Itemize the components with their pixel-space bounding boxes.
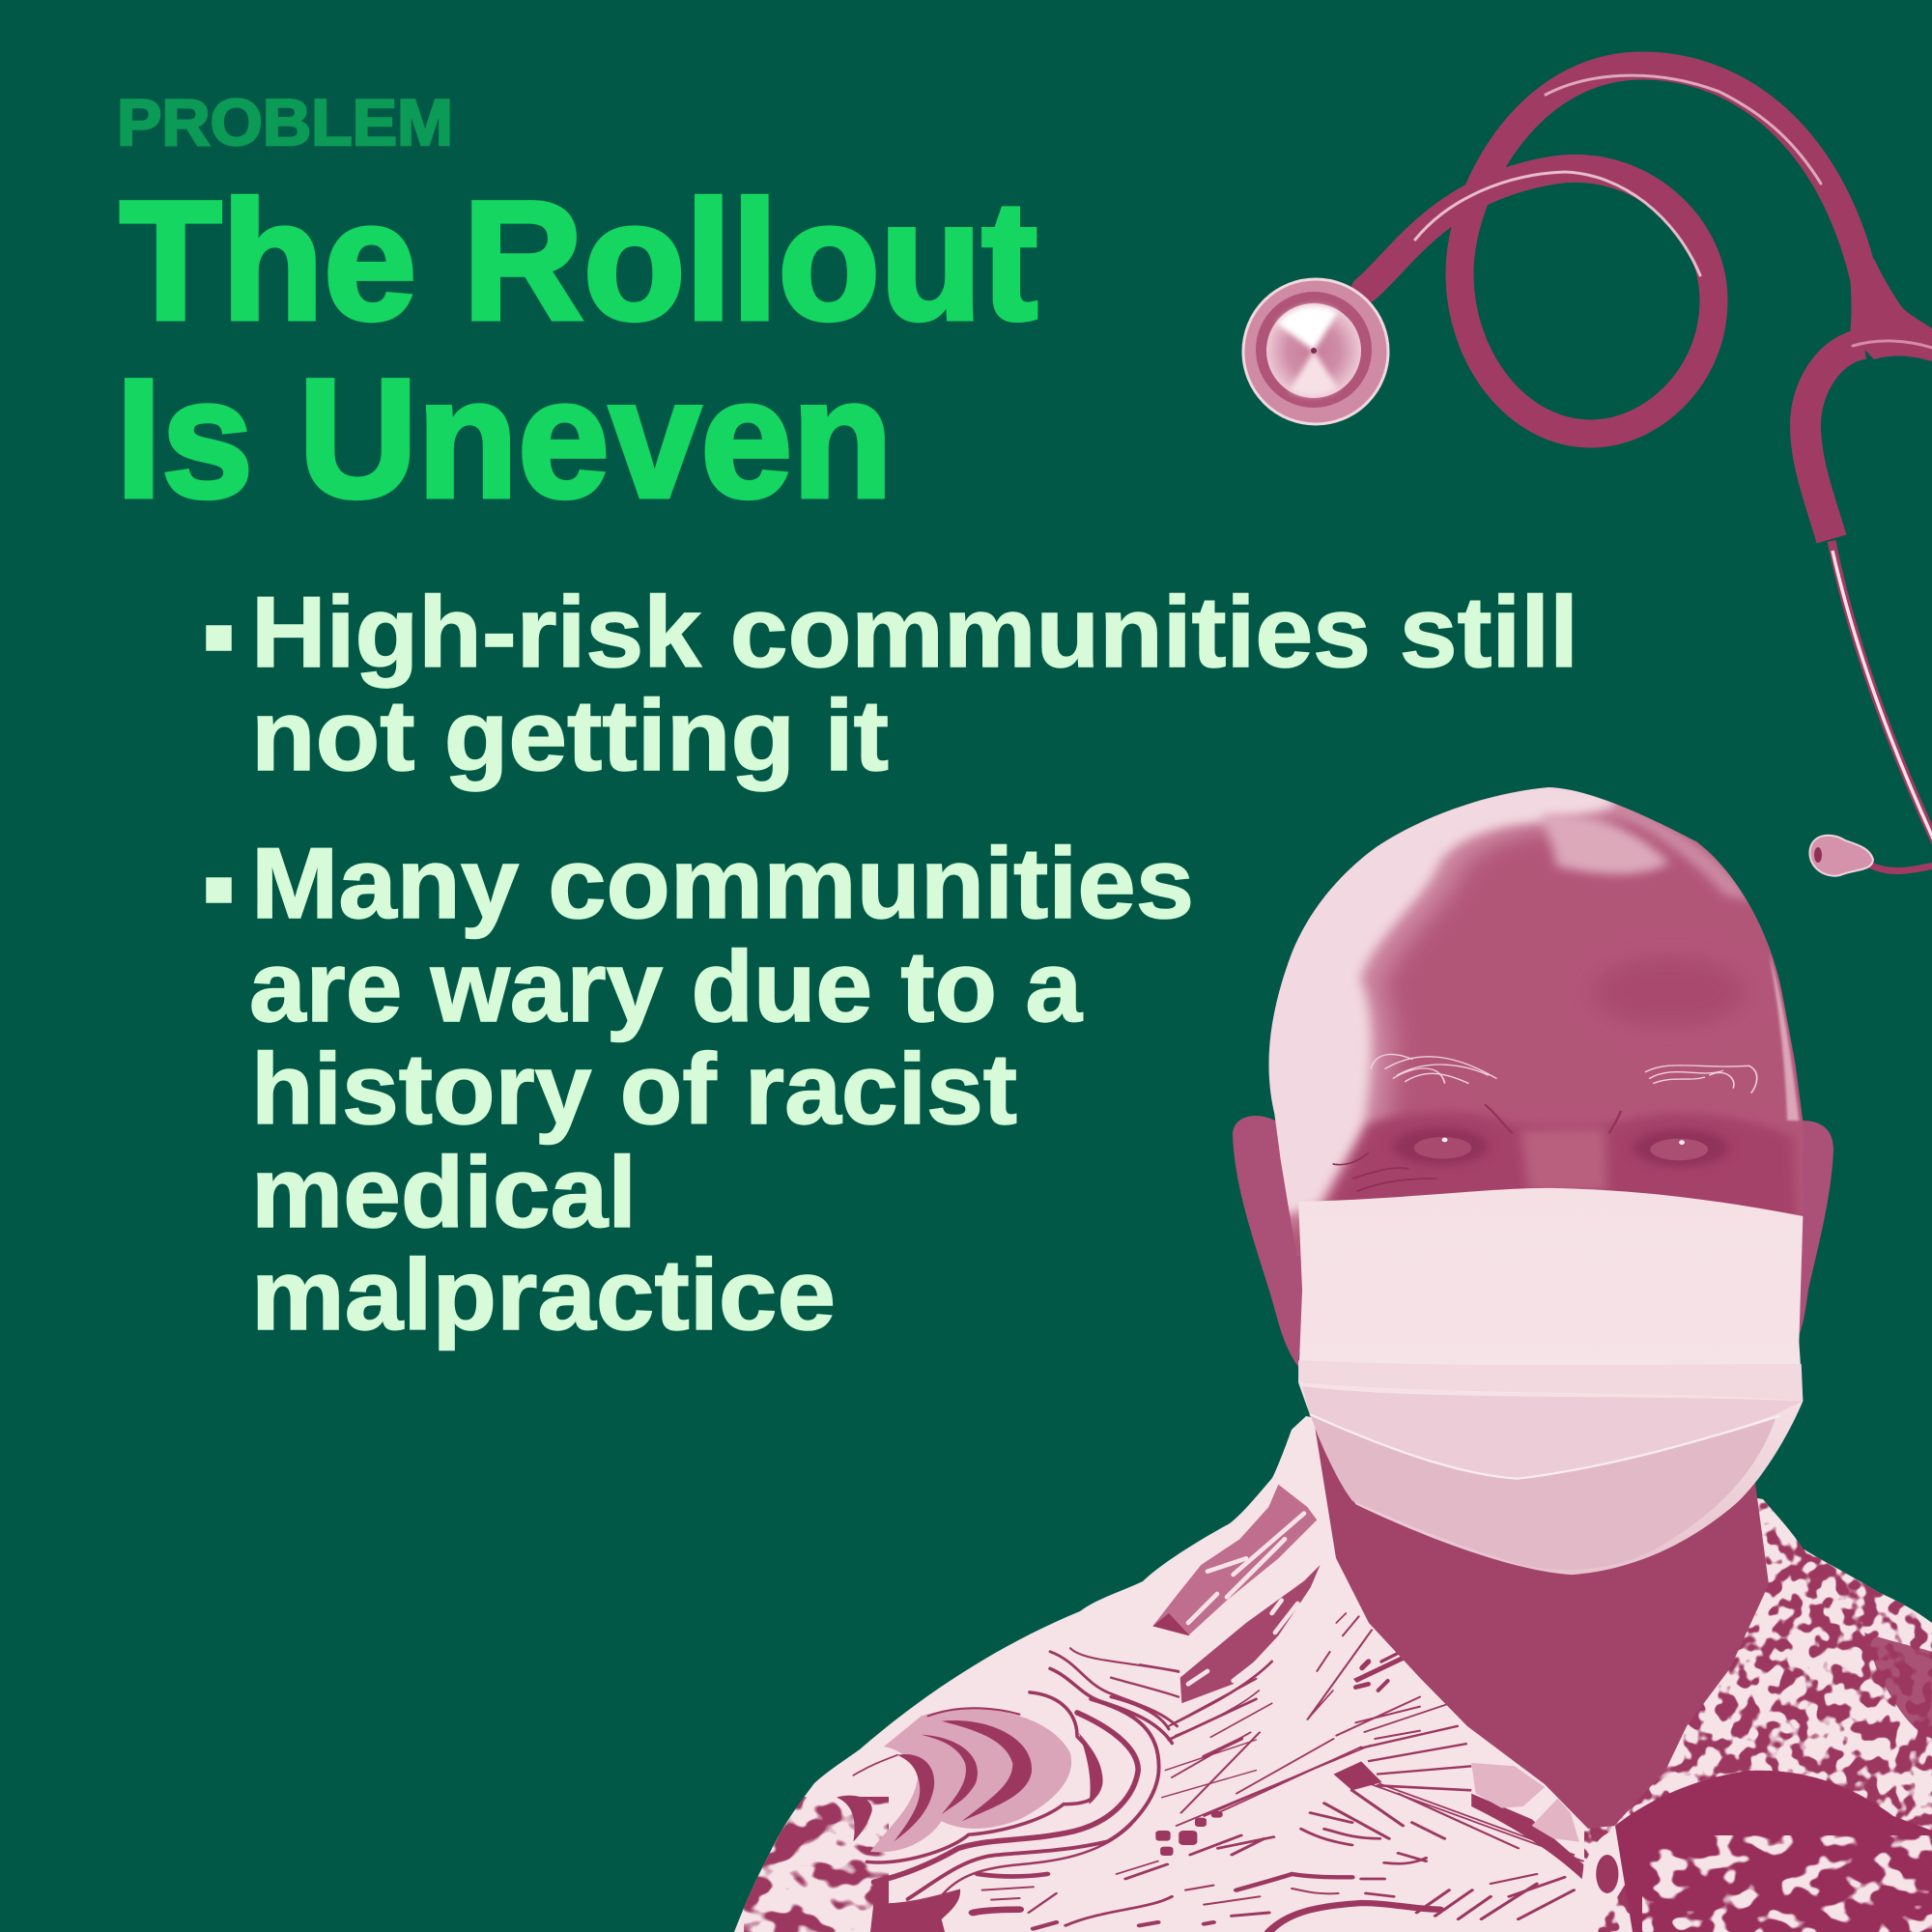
shoulder pale streaks <box>1181 1514 1311 1684</box>
ear tip stem <box>1869 865 1932 871</box>
bullet 2 line 3: history of racist <box>251 1034 1017 1146</box>
ear tip <box>1809 836 1873 876</box>
right rim highlight <box>1769 953 1800 1121</box>
neck <box>1314 1420 1769 1829</box>
swirl pattern <box>837 1648 1256 1932</box>
crescent 4 <box>1079 1733 1102 1804</box>
right ear <box>1787 1121 1833 1343</box>
headset left branch <box>1805 344 1864 539</box>
under collar triangle <box>1333 1761 1382 1790</box>
shoulder pattern <box>1111 1485 1420 1739</box>
mask pleat line <box>1310 1414 1779 1479</box>
man wearing mask <box>715 773 1932 1932</box>
crown rim tone <box>1617 802 1753 901</box>
crescent 1 <box>895 1754 934 1841</box>
shirt <box>715 1391 1932 1932</box>
fan lines <box>973 1780 1583 1932</box>
stippled swirl band <box>870 1709 1071 1852</box>
button <box>1596 1855 1618 1893</box>
bullet marker 2 <box>207 878 231 902</box>
right collar speckle <box>1584 1488 1932 1932</box>
left collar strokes <box>1308 1630 1471 1790</box>
undershirt dark patch <box>1615 1771 1932 1932</box>
bottom left patch <box>870 1889 960 1932</box>
outer tube highlight <box>1546 75 1821 184</box>
left eyebrow <box>1371 1054 1496 1084</box>
mask body <box>1298 1188 1803 1575</box>
headset highlight <box>1853 341 1932 348</box>
shoulder mid tone <box>1152 1485 1317 1635</box>
headset yoke <box>1850 259 1932 361</box>
lower shirt pattern <box>973 1732 1583 1932</box>
bullet list <box>207 577 1578 1351</box>
dashes <box>1155 1811 1223 1856</box>
chest piece centre <box>1311 348 1317 354</box>
right eye socket <box>1633 1129 1729 1167</box>
bullet 2 line 2: are wary due to a <box>249 931 1083 1043</box>
right eyebrow <box>1645 1065 1757 1094</box>
shirt base <box>715 1391 1932 1932</box>
shoulder edge lines <box>1111 1613 1420 1739</box>
mask middle pleat <box>1302 1386 1803 1479</box>
right eye <box>1650 1139 1708 1160</box>
left ear <box>1233 1116 1310 1367</box>
swirl lines <box>853 1648 1179 1899</box>
bullet 1 line 1: High-risk communities still <box>251 577 1578 689</box>
head <box>1269 787 1803 1241</box>
chest piece <box>1243 279 1388 424</box>
nose bridge <box>1520 1128 1607 1191</box>
label: PROBLEM: PROBLEM <box>117 86 453 159</box>
inner loop highlight <box>1415 172 1700 275</box>
chest piece lower wedge <box>1290 351 1338 396</box>
bullet 1 line 2: not getting it <box>251 680 889 792</box>
stethoscope <box>1243 66 1932 876</box>
eye area tone <box>1317 1112 1797 1224</box>
eye wrinkles <box>1333 1152 1436 1191</box>
under collar band <box>1471 1794 1583 1881</box>
left eye glint <box>1442 1138 1447 1142</box>
crown highlight <box>1541 814 1669 874</box>
mask fold shadow <box>1310 1414 1776 1570</box>
metal tube highlight <box>1833 551 1932 842</box>
placket <box>1582 1830 1625 1932</box>
title line 2: Is Uneven <box>116 345 893 533</box>
left eye <box>1414 1137 1471 1159</box>
scalp midtone transition <box>1274 787 1643 1232</box>
crescent 2 <box>922 1735 978 1814</box>
chest piece inner ring <box>1256 292 1372 408</box>
right shoulder dark patch <box>1864 1633 1932 1739</box>
ear tip hole <box>1814 847 1822 863</box>
bullet 2 line 4: medical <box>251 1137 637 1249</box>
left scalp highlight <box>1253 780 1621 1224</box>
undershirt pale blotches <box>1642 1835 1932 1932</box>
crescent 3 <box>942 1720 1032 1821</box>
face mask <box>1298 1188 1803 1575</box>
collar pattern <box>1308 1630 1635 1932</box>
bullet item 1 <box>207 577 1578 792</box>
left eye socket <box>1393 1127 1489 1165</box>
chest piece bright wedge <box>1277 305 1338 351</box>
chest piece rim <box>1243 279 1388 424</box>
mask band <box>1298 1360 1803 1401</box>
bullet item 2 <box>207 828 1194 1351</box>
brow creases <box>1485 1104 1621 1133</box>
bullet marker 1 <box>207 626 231 650</box>
left spot <box>837 1796 872 1841</box>
bullet 2 line 5: malpractice <box>251 1239 836 1351</box>
bullet 2 line 1: Many communities <box>251 828 1194 940</box>
forehead dark patch <box>1593 956 1746 1027</box>
shoulder dark triangle <box>1152 1613 1190 1635</box>
title line 1: The Rollout <box>120 167 1037 355</box>
mid shirt lines <box>1162 1679 1256 1798</box>
chest piece disc <box>1266 303 1361 398</box>
metal ear tube <box>1832 541 1932 845</box>
fold lines <box>1172 1732 1371 1826</box>
title <box>116 167 1037 533</box>
right eye glint <box>1679 1140 1685 1145</box>
collar stipple 2 <box>1532 1799 1579 1842</box>
main tube <box>1365 66 1864 434</box>
shirt pattern lower left blotches <box>744 1797 889 1932</box>
shoulder dark band <box>1180 1565 1321 1703</box>
head base <box>1269 787 1803 1196</box>
collar stipple 1 <box>1471 1763 1545 1808</box>
